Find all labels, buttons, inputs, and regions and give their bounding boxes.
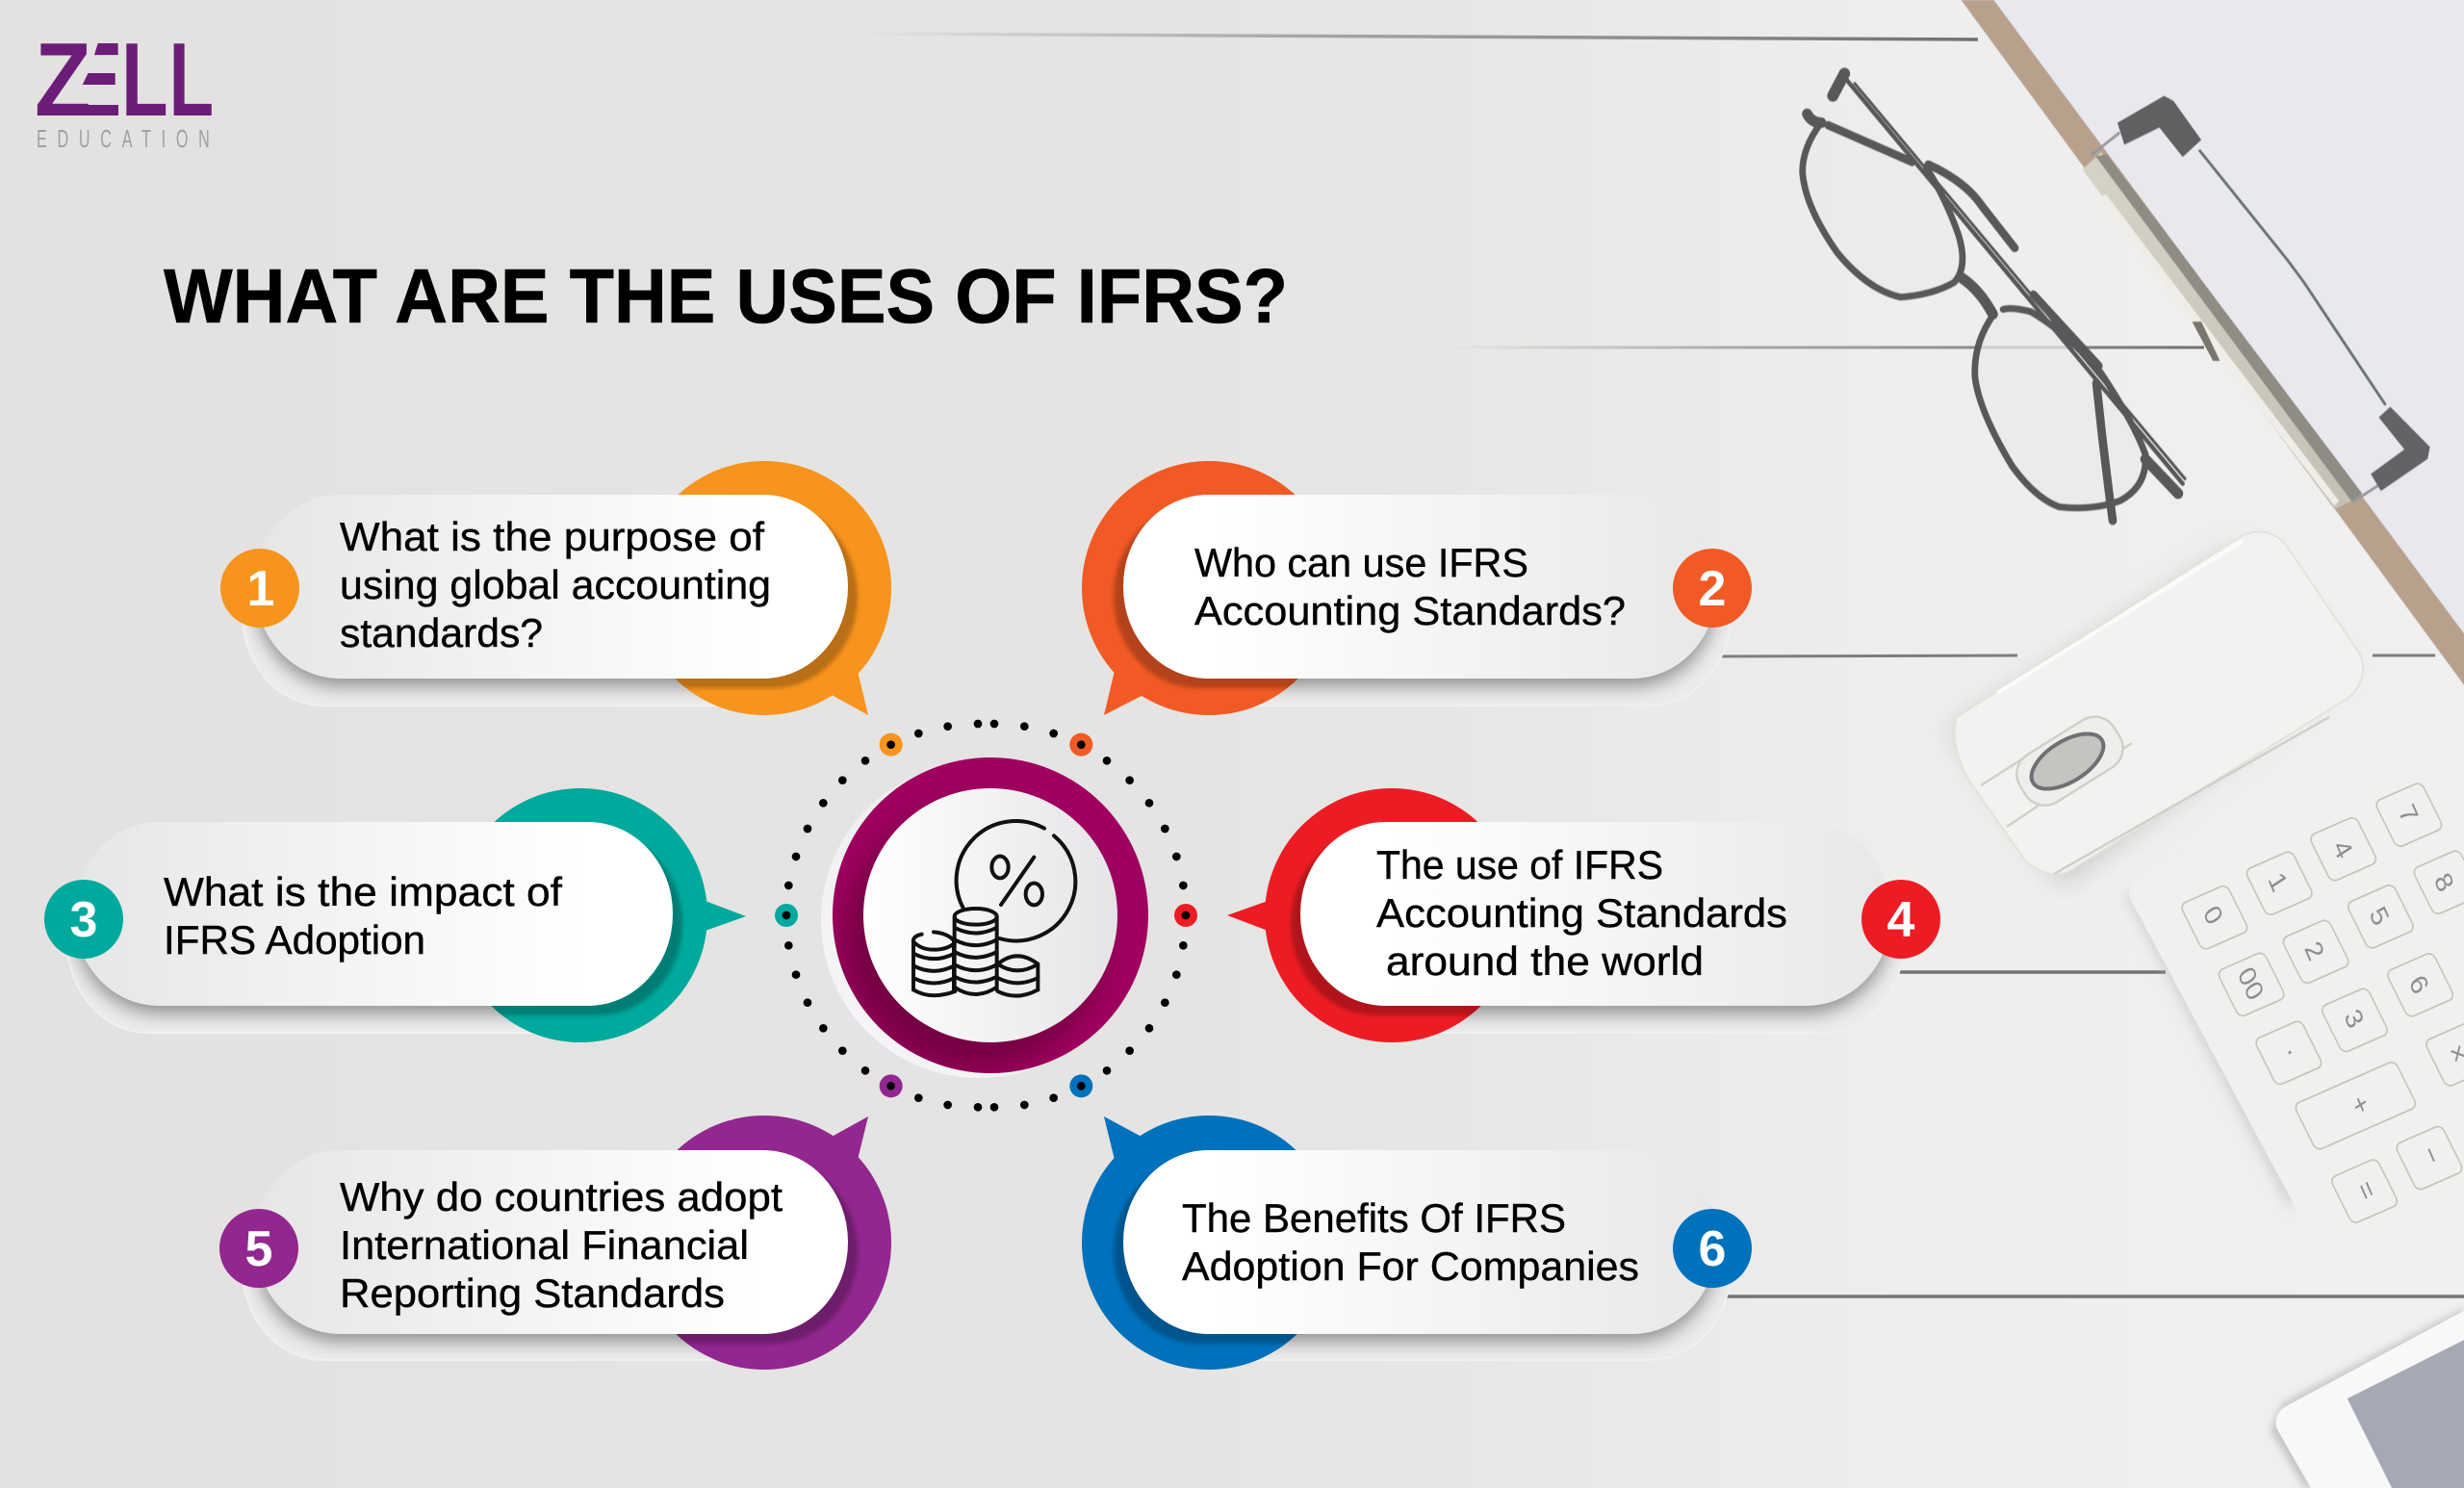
- panel: question 3: [44, 788, 746, 1042]
- calculator: 8: [2429, 867, 2459, 897]
- calculator: 4: [2327, 834, 2358, 864]
- logo wordmark: [37, 43, 212, 115]
- card: [255, 495, 848, 679]
- question text: IFRS Adoption: [164, 917, 425, 962]
- question text: [1376, 842, 1787, 984]
- base shadow: [67, 955, 533, 1034]
- card: [1300, 822, 1891, 1006]
- speech bubble: [1082, 461, 1336, 715]
- number badge: 3: [70, 892, 97, 948]
- question text: Accounting Standards?: [1194, 588, 1626, 633]
- panel: question 4: [1227, 788, 1940, 1042]
- panel: question 5: [219, 1116, 891, 1370]
- calculator: 5: [2364, 901, 2395, 931]
- question text: Reporting Standards: [340, 1270, 725, 1316]
- calculator: 3: [2339, 1004, 2370, 1034]
- base shadow: [243, 624, 718, 706]
- base shadow: [1256, 626, 1723, 706]
- logo wordmark: Z: [35, 20, 91, 138]
- card: [1123, 495, 1717, 679]
- title: WHAT ARE THE USES OF IFRS?: [164, 253, 1288, 339]
- calculator: +: [2346, 1090, 2375, 1120]
- dotted orbit: [775, 720, 1197, 1112]
- number badge: 2: [1699, 561, 1726, 617]
- number badge: [219, 1209, 298, 1288]
- speech bubble: [1082, 1116, 1336, 1370]
- number badge: [1673, 1209, 1752, 1288]
- icon: coins and percent: [913, 821, 1075, 996]
- base shadow: [243, 1205, 718, 1361]
- panel: question 1: [220, 461, 891, 715]
- number badge: 4: [1887, 892, 1915, 948]
- number badge: [220, 549, 299, 628]
- card: [74, 822, 673, 1006]
- question text: Adoption For Companies: [1182, 1244, 1639, 1289]
- calculator: 1: [2263, 867, 2293, 897]
- question text: [340, 1174, 783, 1316]
- logo tagline: EDUCATION: [37, 124, 210, 153]
- bubble shade: [1111, 516, 1297, 691]
- bubble shade: [1288, 843, 1480, 1018]
- question text: The Benefits Of IFRS: [1182, 1195, 1566, 1241]
- hub halo: [821, 762, 1137, 1078]
- card: [255, 1150, 848, 1334]
- panel: question 6: [1082, 1116, 1752, 1370]
- speech bubble: [637, 1116, 891, 1370]
- base shadow: [1256, 1205, 1729, 1361]
- question text: Accounting Standards: [1376, 890, 1787, 936]
- number badge: 5: [245, 1221, 272, 1277]
- clipboard: [1962, 0, 2464, 685]
- hub ring: [833, 757, 1148, 1073]
- bubble shade: [676, 516, 860, 691]
- calculator: 7: [2394, 799, 2424, 829]
- number badge: [44, 880, 123, 959]
- panel: question 2: [1082, 461, 1752, 715]
- calculator: 2: [2299, 936, 2329, 965]
- question text: [1182, 1195, 1639, 1289]
- number badge: [1673, 549, 1752, 628]
- calculator: 0: [2198, 900, 2228, 930]
- speech bubble: [1227, 788, 1519, 1042]
- question text: What is the impact of: [164, 869, 562, 914]
- tablet: [2271, 1308, 2464, 1488]
- question text: [1194, 540, 1626, 633]
- question text: International Financial: [340, 1222, 749, 1268]
- bubble shade: [491, 845, 683, 1017]
- logo wordmark: L: [169, 21, 214, 138]
- number badge: 6: [1699, 1221, 1726, 1277]
- speech bubble: [637, 461, 891, 715]
- calculator: −: [2416, 1140, 2447, 1170]
- glasses: [1803, 74, 2185, 521]
- mouse: [1949, 532, 2363, 885]
- question text: What is the purpose of: [340, 514, 764, 559]
- question text: around the world: [1386, 938, 1704, 984]
- question text: [340, 514, 771, 655]
- background photo: desk objects: [860, 0, 2464, 1488]
- calculator: 00: [2233, 962, 2270, 1006]
- calculator: =: [2351, 1175, 2382, 1205]
- question text: Who can use IFRS: [1194, 540, 1528, 585]
- question text: The use of IFRS: [1376, 842, 1663, 887]
- speech bubble: [453, 788, 746, 1042]
- card: [1123, 1150, 1717, 1334]
- question text: [164, 869, 562, 962]
- base shadow: [1439, 882, 1900, 1034]
- calculator: 6: [2404, 969, 2434, 999]
- calculator: [2125, 717, 2464, 1294]
- logo wordmark: L: [121, 22, 168, 139]
- number badge: 1: [247, 561, 274, 617]
- central hub: [775, 720, 1197, 1112]
- hub inner disc: [863, 788, 1117, 1042]
- logo wordmark: E: [61, 20, 123, 138]
- question text: Why do countries adopt: [340, 1174, 783, 1219]
- bubble shade: [1112, 1172, 1297, 1346]
- question text: using global accounting: [340, 562, 771, 607]
- calculator: .: [2282, 1038, 2309, 1060]
- logo: Zell Education: [37, 43, 212, 148]
- bubble shade: [676, 1174, 859, 1346]
- number badge: [1861, 880, 1940, 959]
- question text: standards?: [340, 610, 543, 655]
